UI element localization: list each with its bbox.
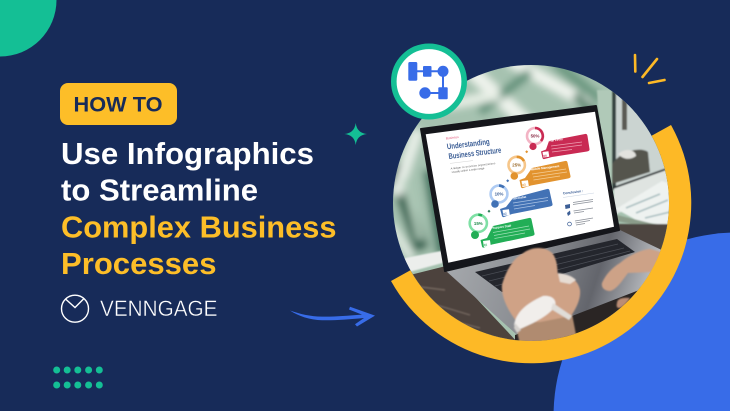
right hand xyxy=(601,248,660,309)
conclusion list: Conclusion : xyxy=(563,189,584,195)
step 3: middle management: Middle Management xyxy=(531,164,560,171)
photo background: desk xyxy=(413,266,515,340)
photo ring: yellow arc xyxy=(391,125,691,363)
conclusion list xyxy=(563,189,594,226)
step 2: specialist: 10% xyxy=(495,192,503,196)
title: Complex Business xyxy=(61,210,336,244)
logo: Venngage: VENNGAGE xyxy=(100,296,218,321)
screen heading: Business xyxy=(446,135,459,140)
step 4: top level: 50% xyxy=(531,134,539,138)
step 3: middle management: 25% xyxy=(512,162,521,168)
photo background: window xyxy=(404,90,669,274)
screen heading: Business Structure xyxy=(448,146,502,161)
step 1: support staff: Support Staff xyxy=(492,224,511,230)
step 2: specialist: Specialist xyxy=(512,195,527,200)
step 3: middle management: 03 xyxy=(522,183,526,187)
title: Processes xyxy=(61,247,216,281)
corner shape: blue blob xyxy=(554,233,730,411)
laptop lid xyxy=(421,106,619,271)
step 4: top level: 04 xyxy=(543,154,547,158)
step 1: support staff: 15% xyxy=(474,221,483,226)
photo: laptop on desk xyxy=(393,65,669,341)
photo background: blurred leaves xyxy=(393,65,669,341)
screen heading: A ledger to prioritize organizations xyxy=(450,161,496,170)
step 4: top level xyxy=(527,128,590,159)
icon: teal sparkle xyxy=(344,123,367,145)
laptop keyboard xyxy=(475,239,635,292)
logo: Venngage xyxy=(62,295,218,322)
title xyxy=(61,137,336,281)
icon: teal dot grid xyxy=(53,366,103,388)
laptop screen: infographic xyxy=(426,112,614,263)
screen heading xyxy=(446,135,502,174)
title: to Streamline xyxy=(61,174,258,208)
badge: HOW TO xyxy=(60,83,177,125)
step 1: support staff: 01 xyxy=(484,243,488,247)
screen heading: visually within a wide range xyxy=(451,166,485,174)
step 3: middle management xyxy=(508,150,571,188)
left hand with watch xyxy=(502,248,580,345)
arrow xyxy=(290,307,375,326)
icon: yellow spark lines xyxy=(635,55,664,83)
title: Use Infographics xyxy=(61,137,314,171)
laptop base xyxy=(446,230,672,334)
icon: process flow badge xyxy=(394,46,464,117)
step 2: specialist xyxy=(491,179,553,217)
badge: HOW TO: HOW TO xyxy=(74,93,162,117)
step 1: support staff xyxy=(470,210,535,248)
screen heading: Understanding xyxy=(446,137,490,151)
corner shape: teal quarter circle xyxy=(0,0,56,56)
step 4: top level: Top Level xyxy=(549,137,563,143)
step 2: specialist: 02 xyxy=(503,212,507,216)
